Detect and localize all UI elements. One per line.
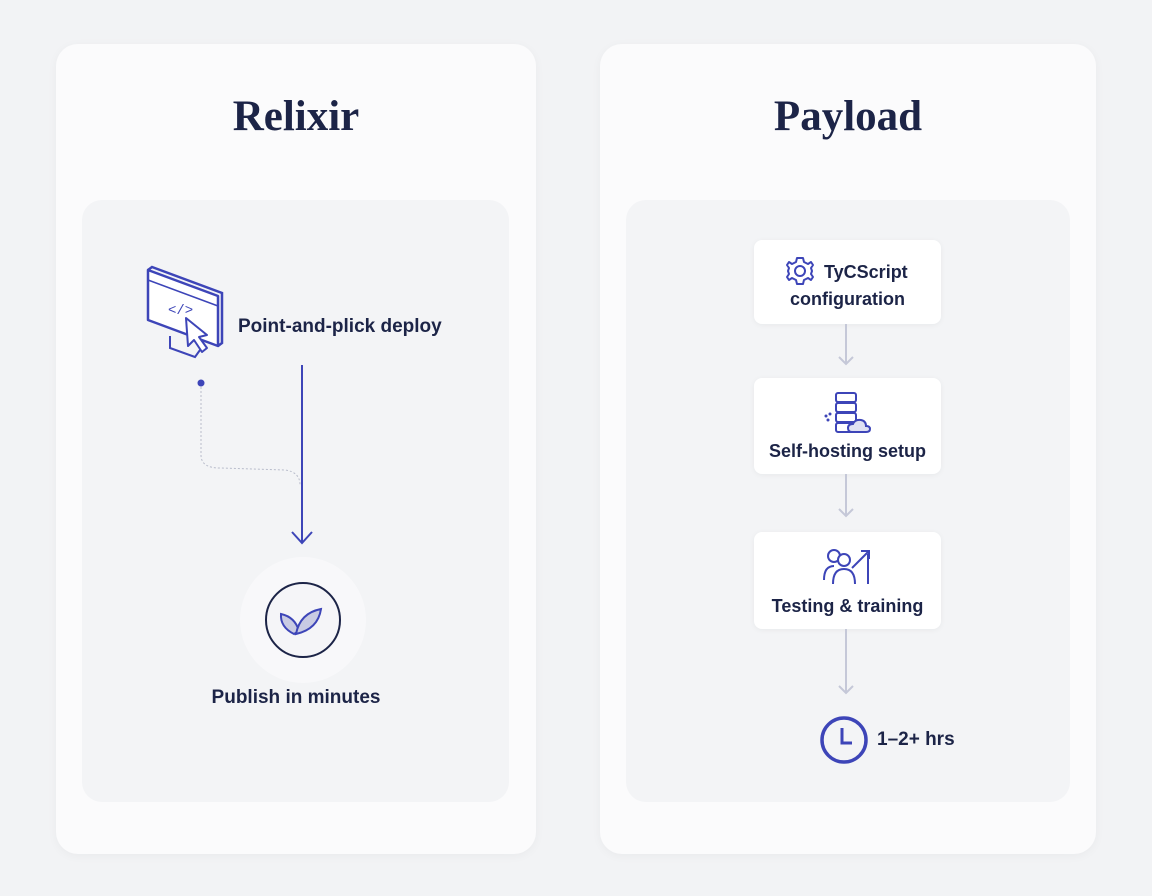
arrow 3: [838, 629, 854, 694]
icon: monitor with cursor: </>: [168, 303, 193, 319]
icon: people with growth arrow: [823, 549, 870, 584]
icon: check leaf circle: [265, 582, 341, 658]
icon: monitor with cursor: [146, 266, 224, 358]
label: point-and-plick deploy: Point-and-plick deploy: [238, 316, 442, 337]
label: publish in minutes: Publish in minutes: [212, 687, 380, 708]
box: testing & training: Testing & training: [772, 596, 923, 616]
title: Payload: Payload: [774, 93, 922, 140]
box: self-hosting setup: Self-hosting setup: [769, 441, 926, 461]
arrow 1: [838, 324, 854, 366]
inner panel: Payload flow: [626, 200, 1070, 802]
label: 1–2+ hrs: 1–2+ hrs: [877, 729, 955, 750]
box: TyCScript configuration: [754, 240, 941, 324]
connector lines: [198, 365, 313, 544]
inner panel: Relixir flow: [82, 200, 509, 802]
icon: server cloud: [824, 392, 871, 433]
box: TyCScript configuration: configuration: [790, 289, 905, 309]
box: self-hosting setup: [754, 378, 941, 474]
panel: Relixir: [56, 44, 536, 854]
title: Relixir: Relixir: [233, 93, 359, 140]
icon: clock: [820, 716, 868, 764]
box: testing & training: [754, 532, 941, 629]
box: TyCScript configuration: TyCScript: [824, 262, 908, 282]
icon: gear: [786, 257, 814, 285]
panel: Payload: [600, 44, 1096, 854]
arrow 2: [838, 474, 854, 518]
